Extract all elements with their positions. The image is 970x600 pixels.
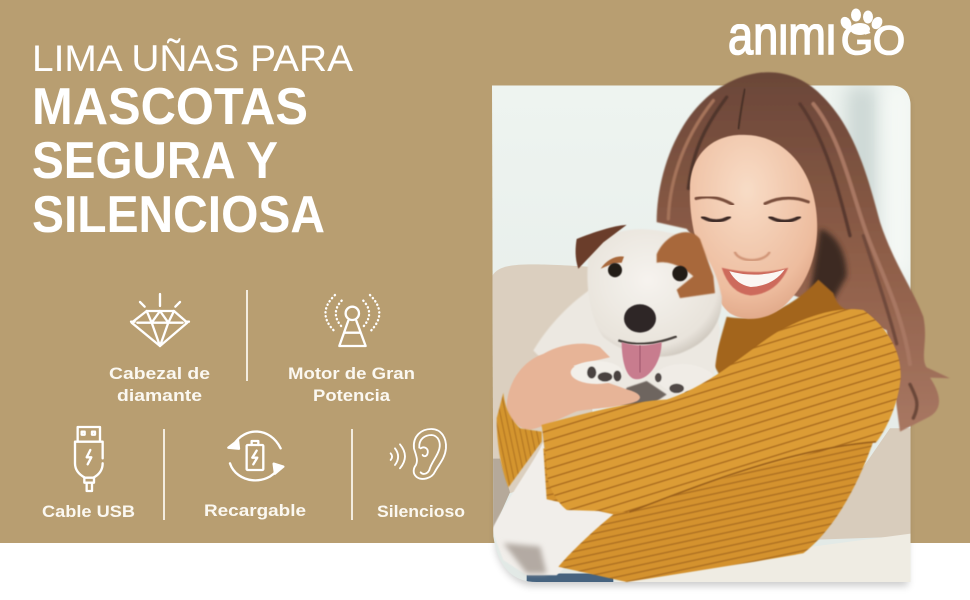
eyes and brows (696, 197, 808, 260)
title (32, 38, 353, 244)
dog (533, 225, 722, 408)
title: SEGURA Y (32, 132, 278, 190)
title: SILENCIOSA (32, 186, 325, 244)
feature: Motor de Gran Potencia (288, 295, 415, 405)
hair back (657, 72, 950, 432)
feature: Cabezal de diamante: Cabezal de (109, 364, 210, 383)
feature: Cabezal de diamante: diamante (117, 386, 202, 405)
sweater (497, 309, 901, 582)
feature: Recargable (204, 432, 306, 520)
divider (163, 429, 165, 520)
turtleneck (713, 280, 847, 376)
smile (722, 268, 788, 295)
dog paws (571, 361, 713, 400)
dog lower body (492, 442, 620, 575)
logo: animigo: animi (728, 4, 836, 66)
feature: Motor de Gran Potencia: Potencia (313, 386, 391, 405)
icon: ear with sound waves (391, 429, 446, 479)
logo: animigo: GO (841, 19, 905, 63)
icon: recharge battery (228, 432, 283, 480)
icon: diamond (131, 294, 189, 346)
feature: Cable USB (42, 427, 135, 521)
feature: Motor de Gran Potencia: Motor de Gran (288, 364, 415, 383)
feature: Cable USB: Cable USB (42, 502, 135, 521)
card shadow (496, 100, 908, 586)
face (690, 135, 817, 319)
feature: Recargable: Recargable (204, 501, 306, 520)
hair strands (668, 97, 917, 418)
feature: Silencioso (377, 429, 465, 521)
icon: usb cable (75, 427, 103, 491)
feature: Silencioso: Silencioso (377, 502, 465, 521)
title: LIMA UÑAS PARA (32, 38, 353, 79)
photo: woman hugging dog (492, 72, 950, 586)
clipped photo background (492, 85, 911, 584)
feature: Cabezal de diamante (109, 294, 210, 405)
title: MASCOTAS (32, 78, 308, 136)
divider (246, 290, 248, 381)
divider (351, 429, 353, 520)
hand (507, 344, 640, 430)
icon: motor tower (325, 295, 379, 346)
